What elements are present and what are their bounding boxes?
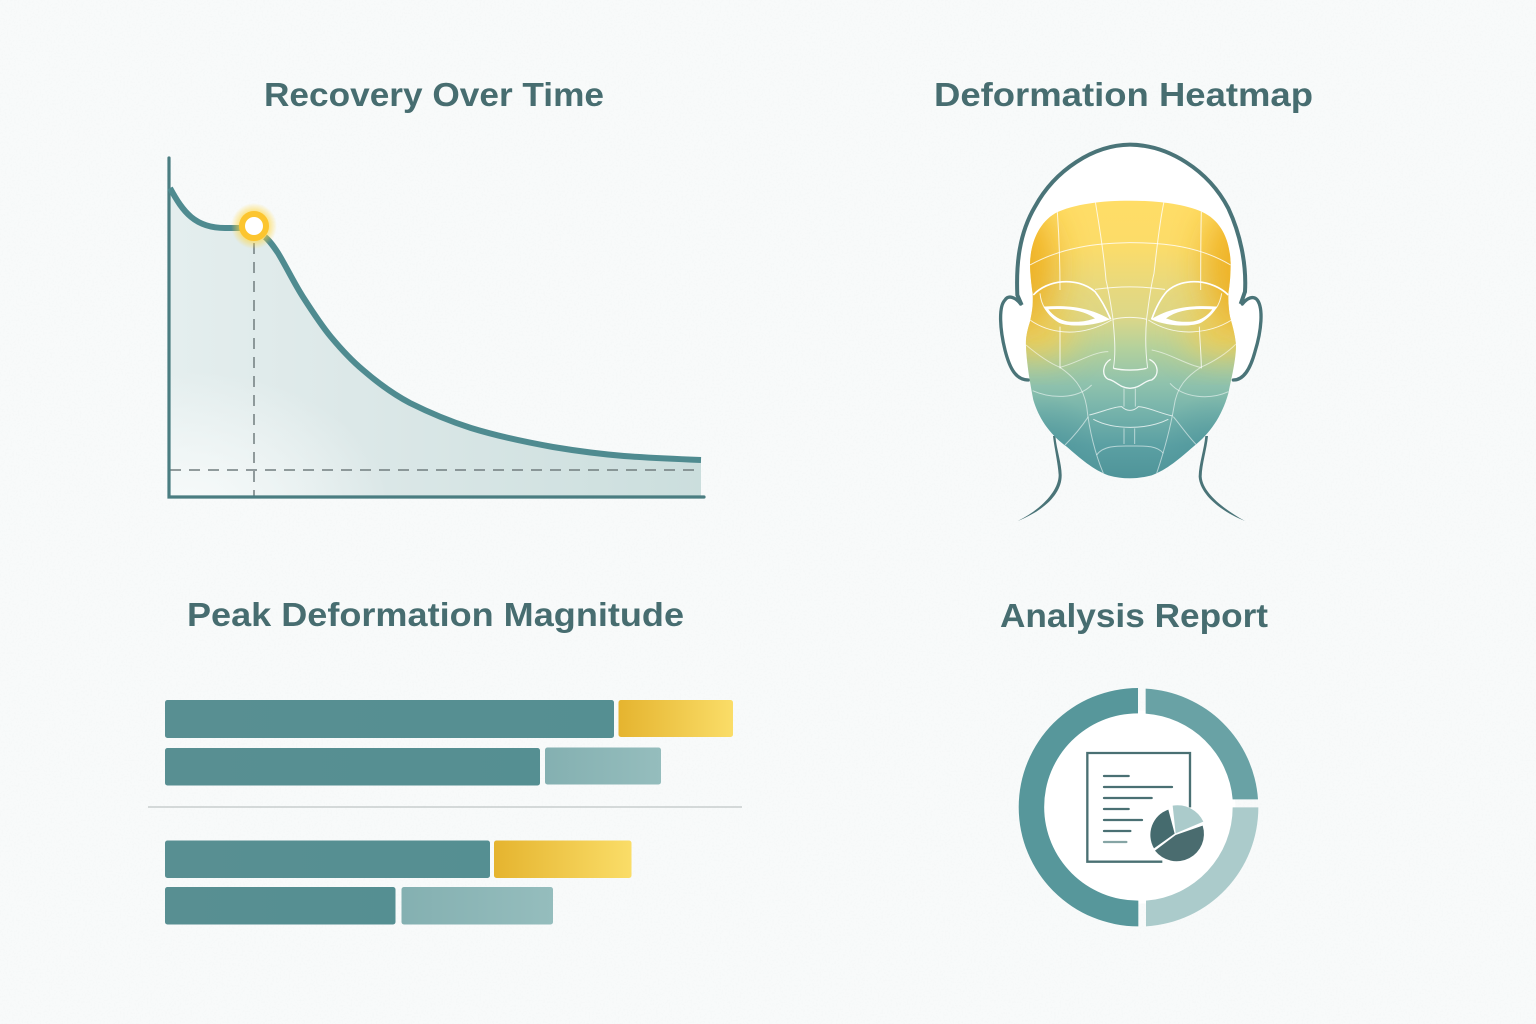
report icon [1019, 688, 1258, 926]
head outline [1017, 145, 1245, 305]
face illustration [998, 142, 1263, 521]
mesh lines [1030, 202, 1232, 368]
heading: Recovery Over Time: Recovery Over Time [264, 76, 604, 113]
heading: Peak Deformation Magnitude: Peak Deformation Magnitude [187, 596, 684, 633]
document outline [1087, 753, 1190, 862]
panel: analysis report [1000, 597, 1268, 926]
document text lines [1104, 776, 1172, 842]
divider [148, 806, 742, 808]
bar group: lower [165, 840, 632, 924]
reference dashed lines [170, 243, 702, 497]
pie chart [1150, 805, 1204, 861]
nose [1104, 359, 1157, 388]
bar group: upper [165, 700, 733, 786]
head interior [1001, 145, 1261, 430]
heatmap face [1026, 200, 1236, 478]
axes [169, 158, 704, 497]
recovery curve line [170, 188, 701, 460]
heading: Deformation Heatmap: Deformation Heatmap [934, 76, 1313, 113]
heading: Analysis Report: Analysis Report [1000, 597, 1268, 634]
donut ring segments [1019, 688, 1258, 926]
peak marker [231, 203, 277, 249]
line chart: recovery curve [169, 158, 704, 498]
bar 3 [165, 840, 632, 878]
ears [1001, 297, 1261, 380]
bar 1 [165, 700, 733, 738]
donut interior [1042, 710, 1235, 904]
panel: deformation heatmap [934, 76, 1313, 521]
bar 4 [165, 887, 553, 924]
neck lines [1018, 436, 1245, 521]
left eye [1033, 282, 1111, 325]
chart area fill [170, 180, 701, 498]
panel: peak deformation magnitude [148, 596, 742, 924]
right eye [1151, 282, 1228, 325]
lower mesh lines [1026, 344, 1236, 473]
bar 2 [165, 748, 661, 786]
panel: recovery over time [169, 76, 704, 498]
mouth [1089, 407, 1173, 427]
